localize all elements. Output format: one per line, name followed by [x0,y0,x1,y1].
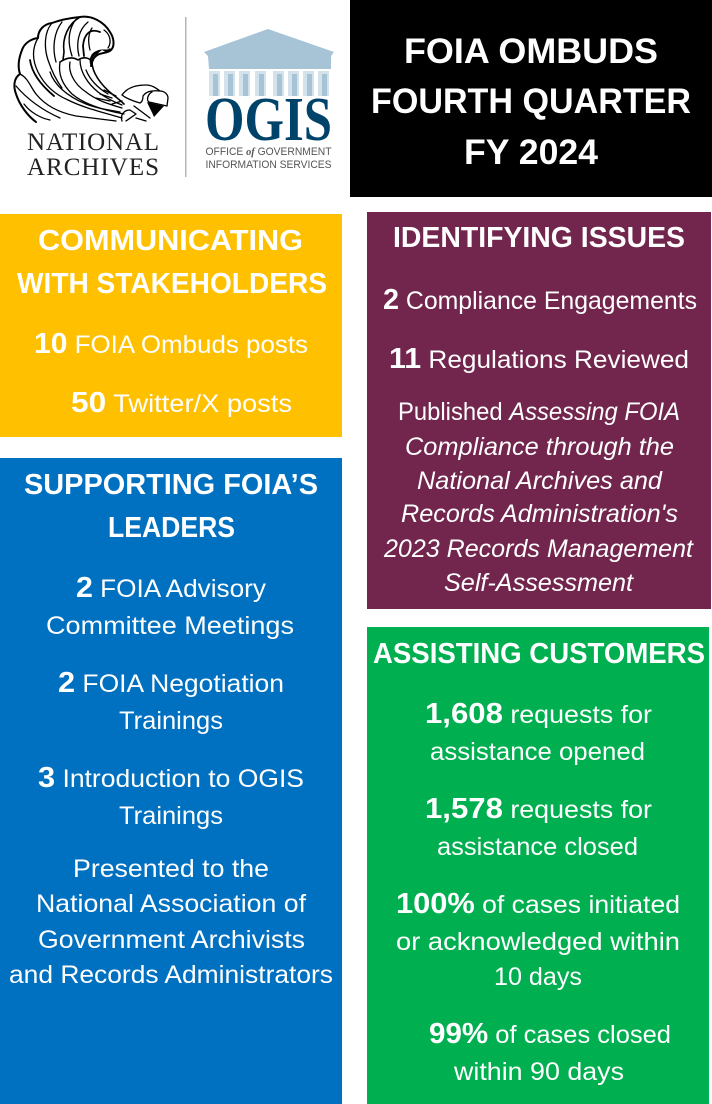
text: published report: Published Assessing FOIA [398,398,680,426]
text: Office of Government Information Services: INFORMATION SERVICES [206,159,332,171]
stat: requests closed: 1,578 requests for [425,793,652,825]
stat: cases closed: 99% of cases closed [429,1018,671,1050]
text: presentation: Government Archivists [38,926,305,954]
stat: Twitter/X posts: 50 Twitter/X posts [71,387,292,419]
stat: regulations reviewed: 11 Regulations Reviewed [389,343,689,375]
logo divider [185,17,186,177]
heading: LEADERS [108,512,235,544]
stat: cases initiated or acknowledged: 100% of cases initiated [396,888,680,920]
text: presentation: and Records Administrators [9,961,333,989]
icon: building columns [209,71,329,96]
heading: title: FY 2024 [464,133,599,172]
panel: supporting FOIA's leaders [0,458,342,1104]
text: published report: Records Administration's [401,500,678,528]
heading: ASSISTING CUSTOMERS [373,638,705,670]
text: published report: Self-Assessment [444,569,634,597]
stat: cases initiated or acknowledged: or acknowledged within [396,928,680,956]
heading: WITH STAKEHOLDERS [17,268,327,300]
stat: introduction to OGIS trainings [38,762,304,830]
stat: requests opened [425,698,652,766]
stat: requests closed: assistance closed [437,833,638,861]
panel: communicating with stakeholders [0,214,342,437]
text: presentation: Presented to the [73,855,269,883]
panel: identifying issues [367,212,711,609]
icon: building pediment [204,29,334,69]
text: National Archives wordmark [27,129,159,181]
stat: advisory committee meetings [46,572,294,640]
stat: cases closed: within 90 days [453,1058,624,1086]
stat: FOIA Ombuds posts: 10 FOIA Ombuds posts [34,328,308,360]
stat: negotiation trainings: Trainings [119,707,223,735]
text: published report: Compliance through the [405,433,674,461]
text: published report: National Archives and [417,467,663,495]
icon: eagle [14,17,168,122]
text: Office of Government Information Services: OFFICE of GOVERNMENT [206,146,332,158]
stat: compliance engagements: 2 Compliance Engagements [383,284,697,316]
heading [24,469,318,544]
panel: title [350,0,712,197]
logo: OGIS [204,29,334,171]
heading: title: FOIA OMBUDS [404,32,658,71]
text: Office of Government Information Services [206,146,332,171]
panel: assisting customers [367,627,709,1104]
heading: SUPPORTING FOIA’S [24,469,318,501]
stat: introduction to OGIS trainings: Trainings [119,802,223,830]
heading: title: FOURTH QUARTER [371,82,691,121]
text: National Archives wordmark: NATIONAL [27,129,159,156]
heading: COMMUNICATING [38,225,303,257]
heading [17,225,327,300]
stat: introduction to OGIS trainings: 3 Introduction to OGIS [38,762,304,794]
heading: title [371,32,691,172]
stat: requests opened: assistance opened [430,738,645,766]
stat: negotiation trainings [58,667,284,735]
stat: advisory committee meetings: Committee Meetings [46,612,294,640]
stat: cases closed [429,1018,671,1086]
stat: negotiation trainings: 2 FOIA Negotiation [58,667,284,699]
text: presentation [9,855,333,989]
stat: requests closed [425,793,652,861]
stat: requests opened: 1,608 requests for [425,698,652,730]
text: National Archives wordmark: ARCHIVES [27,154,159,181]
stat: advisory committee meetings: 2 FOIA Advisory [76,572,267,604]
text: OGIS: OGIS [205,86,332,154]
heading: IDENTIFYING ISSUES [393,222,685,254]
stat: cases initiated or acknowledged: 10 days [494,963,582,991]
text: presentation: National Association of [36,890,306,918]
logo: National Archives [14,17,168,181]
text: published report [383,398,694,597]
stat: cases initiated or acknowledged [396,888,680,991]
text: published report: 2023 Records Management [383,535,694,563]
